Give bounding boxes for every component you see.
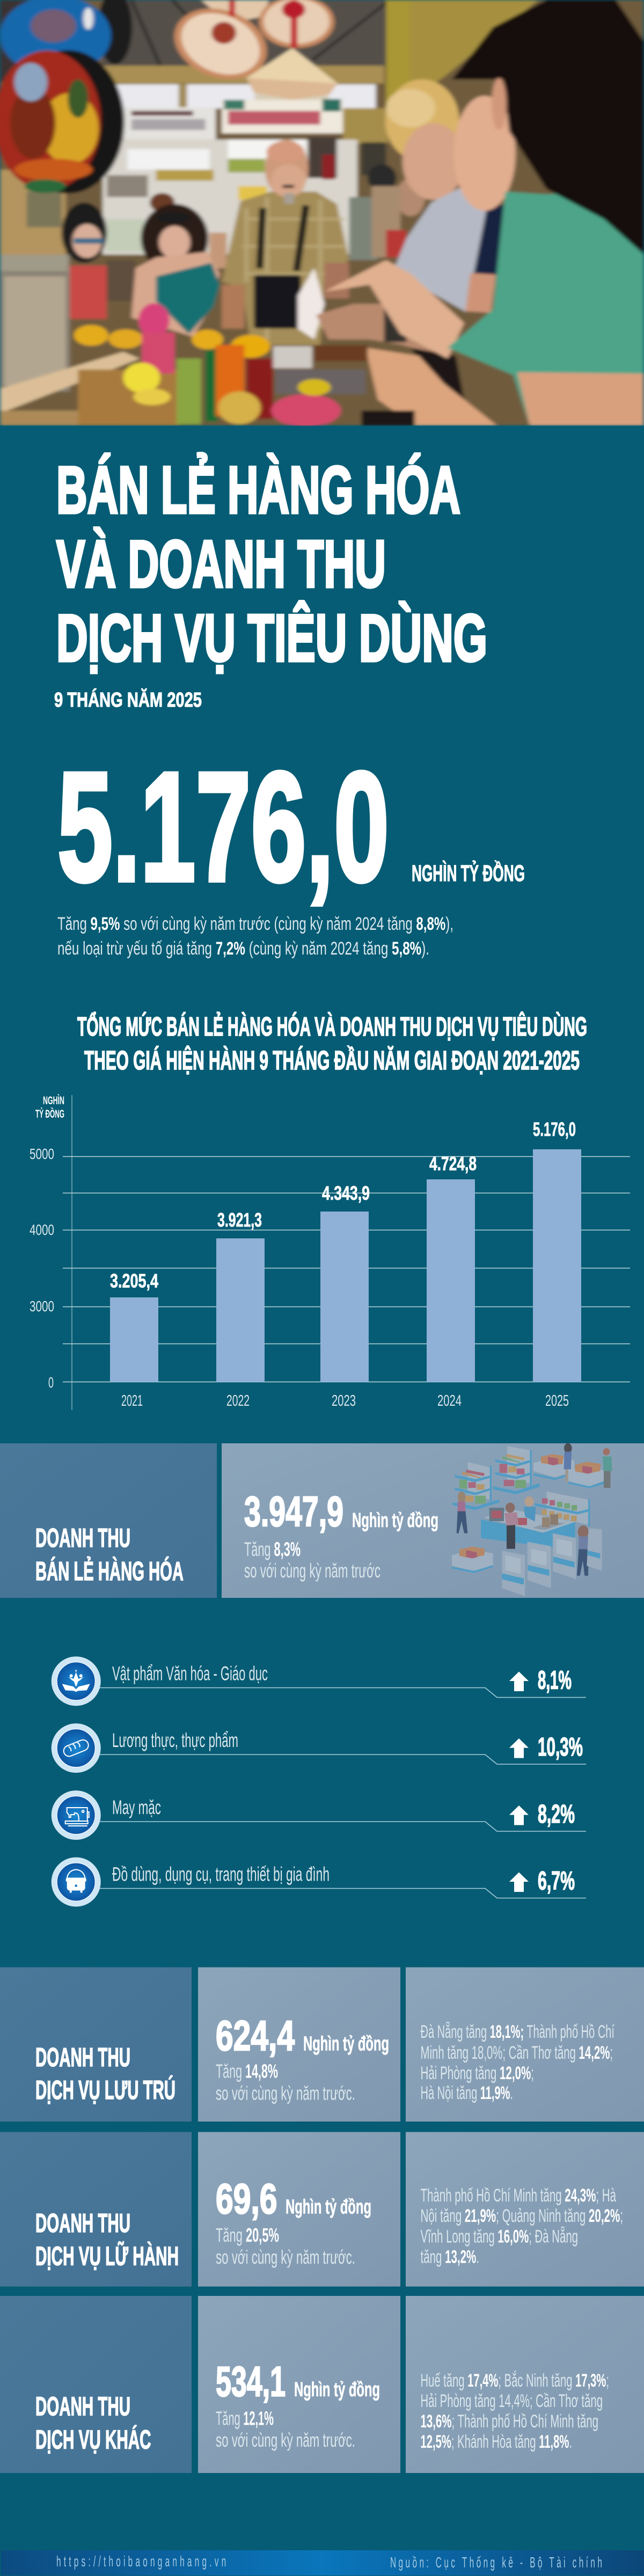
heading: DỊCH VỤ LƯU TRÚ (35, 2075, 175, 2105)
row: food: 10,3% (538, 1733, 583, 1762)
bar chart: 3.205,4 (110, 1269, 158, 1292)
figure: Tăng 20,5% (216, 2224, 279, 2246)
bar chart: 5000 (30, 1146, 54, 1162)
icon: bread (52, 1723, 101, 1773)
figure: Nghìn tỷ đồng (303, 2032, 389, 2055)
provinces (421, 2370, 609, 2452)
source: Nguồn: Cục Thống kê - Bộ Tài chính (390, 2554, 602, 2571)
title (56, 453, 487, 676)
growth note: nếu loại trừ yếu tố giá tăng 7,2% (cùng kỳ năm 2024 tăng 5,8%). (57, 938, 429, 959)
provinces (421, 2185, 623, 2267)
panel: retail revenue value: Nghìn tỷ đồng (352, 1509, 438, 1532)
row: household goods: 6,7% (538, 1867, 575, 1895)
row: cultural goods: 8,1% (538, 1667, 572, 1694)
row: household goods: Đồ dùng, dụng cụ, trang thiết bị gia đình (112, 1863, 330, 1885)
panel: accommodation services (0, 1967, 644, 2122)
figure: 624,4 (216, 2012, 295, 2059)
provinces: Huế tăng 17,4%; Bắc Ninh tăng 17,3%; (421, 2370, 609, 2391)
figure: Tăng 14,8% (216, 2060, 278, 2082)
bar chart: 3.921,3 (217, 1209, 262, 1231)
panel: retail revenue heading: BÁN LẺ HÀNG HÓA (35, 1557, 184, 1586)
arrow up (509, 1738, 529, 1758)
subtitle: period: 9 THÁNG NĂM 2025 (54, 688, 202, 711)
figure (216, 2175, 371, 2268)
provinces: tăng 13,2%. (421, 2247, 479, 2267)
heading: DỊCH VỤ LỮ HÀNH (35, 2242, 179, 2271)
figure: so với cùng kỳ năm trước. (216, 2246, 355, 2268)
figure: Nghìn tỷ đồng (286, 2196, 371, 2218)
provinces (421, 2022, 614, 2103)
checkout counter (481, 1520, 575, 1548)
panel: other services (0, 2296, 644, 2473)
figure (216, 2358, 380, 2451)
provinces: Nội tăng 21,9%; Quảng Ninh tăng 20,2%; (421, 2206, 623, 2226)
bar chart: 4000 (30, 1221, 54, 1238)
bar chart: 4.724,8 (429, 1153, 477, 1175)
figure: so với cùng kỳ năm trước. (216, 2082, 355, 2104)
figure: so với cùng kỳ năm trước. (216, 2429, 355, 2451)
bar chart: 2024 (437, 1392, 462, 1410)
bar chart: TỶ ĐỒNG (35, 1107, 64, 1120)
row: cultural goods (52, 1656, 586, 1706)
bar chart: 2021 (121, 1392, 143, 1410)
illustration: store scene (452, 1443, 612, 1596)
panel: retail revenue value: Tăng 8,3% (244, 1538, 301, 1560)
provinces: Hải Phòng tăng 12,0%; (421, 2063, 534, 2083)
bar chart: 2022 (226, 1392, 250, 1410)
hero photo: shoppers at a market stall (0, 0, 644, 427)
panel: retail revenue heading: DOANH THU (35, 1524, 130, 1553)
panel: retail revenue heading (0, 1443, 217, 1598)
icon: sewing machine (52, 1790, 101, 1840)
provinces: Hà Nội tăng 11,9%. (421, 2083, 513, 2103)
heading (35, 2209, 179, 2271)
provinces: Vĩnh Long tăng 16,0%; Đà Nẵng (421, 2227, 578, 2247)
figure (216, 2012, 389, 2104)
retail revenue figure: 3.947,9 (244, 1487, 343, 1535)
arrow up (509, 1806, 529, 1825)
row: clothing: May mặc (112, 1796, 161, 1818)
headline figure: 5.176,0 (57, 740, 389, 914)
row: food: Lương thực, thực phẩm (112, 1729, 238, 1751)
panel: retail revenue value: so với cùng kỳ năm trước (244, 1560, 380, 1582)
heading: DOANH THU (35, 2043, 130, 2072)
bar chart: 0 (48, 1374, 54, 1391)
row: cultural goods: Vật phẩm Văn hóa - Giáo dục (112, 1662, 268, 1685)
provinces: 12,5%; Khánh Hòa tăng 11,8%. (421, 2432, 572, 2452)
website: https://thoibaonganhang.vn (56, 2553, 226, 2570)
icon: book and figures (52, 1656, 101, 1706)
title: VÀ DOANH THU (56, 527, 386, 601)
row: clothing (52, 1790, 586, 1840)
figure: Tăng 12,1% (216, 2407, 274, 2430)
heading: DỊCH VỤ KHÁC (35, 2425, 151, 2454)
heading: DOANH THU (35, 2209, 130, 2238)
heading (35, 2392, 151, 2454)
headline figure: NGHÌN TỶ ĐỒNG (412, 860, 525, 886)
bar chart: 2025 (545, 1392, 569, 1410)
heading (35, 2043, 175, 2105)
arrow up (509, 1873, 529, 1892)
row: food (52, 1723, 586, 1773)
footer bar (1, 2550, 644, 2575)
bar chart: 4.343,9 (322, 1182, 370, 1204)
bar chart: NGHÌN (43, 1095, 64, 1107)
figure: Nghìn tỷ đồng (294, 2379, 380, 2401)
row: clothing: 8,2% (538, 1800, 575, 1829)
growth note (57, 914, 453, 959)
heading: DOANH THU (35, 2392, 130, 2421)
panel: travel services (0, 2132, 644, 2287)
figure: 534,1 (216, 2358, 286, 2405)
row: household goods (52, 1858, 586, 1907)
growth note: Tăng 9,5% so với cùng kỳ năm trước (cùng kỳ năm 2024 tăng 8,8%), (57, 914, 453, 934)
bar chart: 5.176,0 (533, 1118, 576, 1140)
bar chart: 2023 (332, 1392, 356, 1410)
icon: rice cooker (52, 1858, 101, 1907)
arrow up (509, 1672, 529, 1691)
bar chart: 3000 (30, 1298, 54, 1315)
figure: 69,6 (216, 2175, 277, 2222)
bar chart (30, 1095, 630, 1410)
panel: retail revenue value (222, 1443, 644, 1598)
chart title (77, 1012, 587, 1075)
